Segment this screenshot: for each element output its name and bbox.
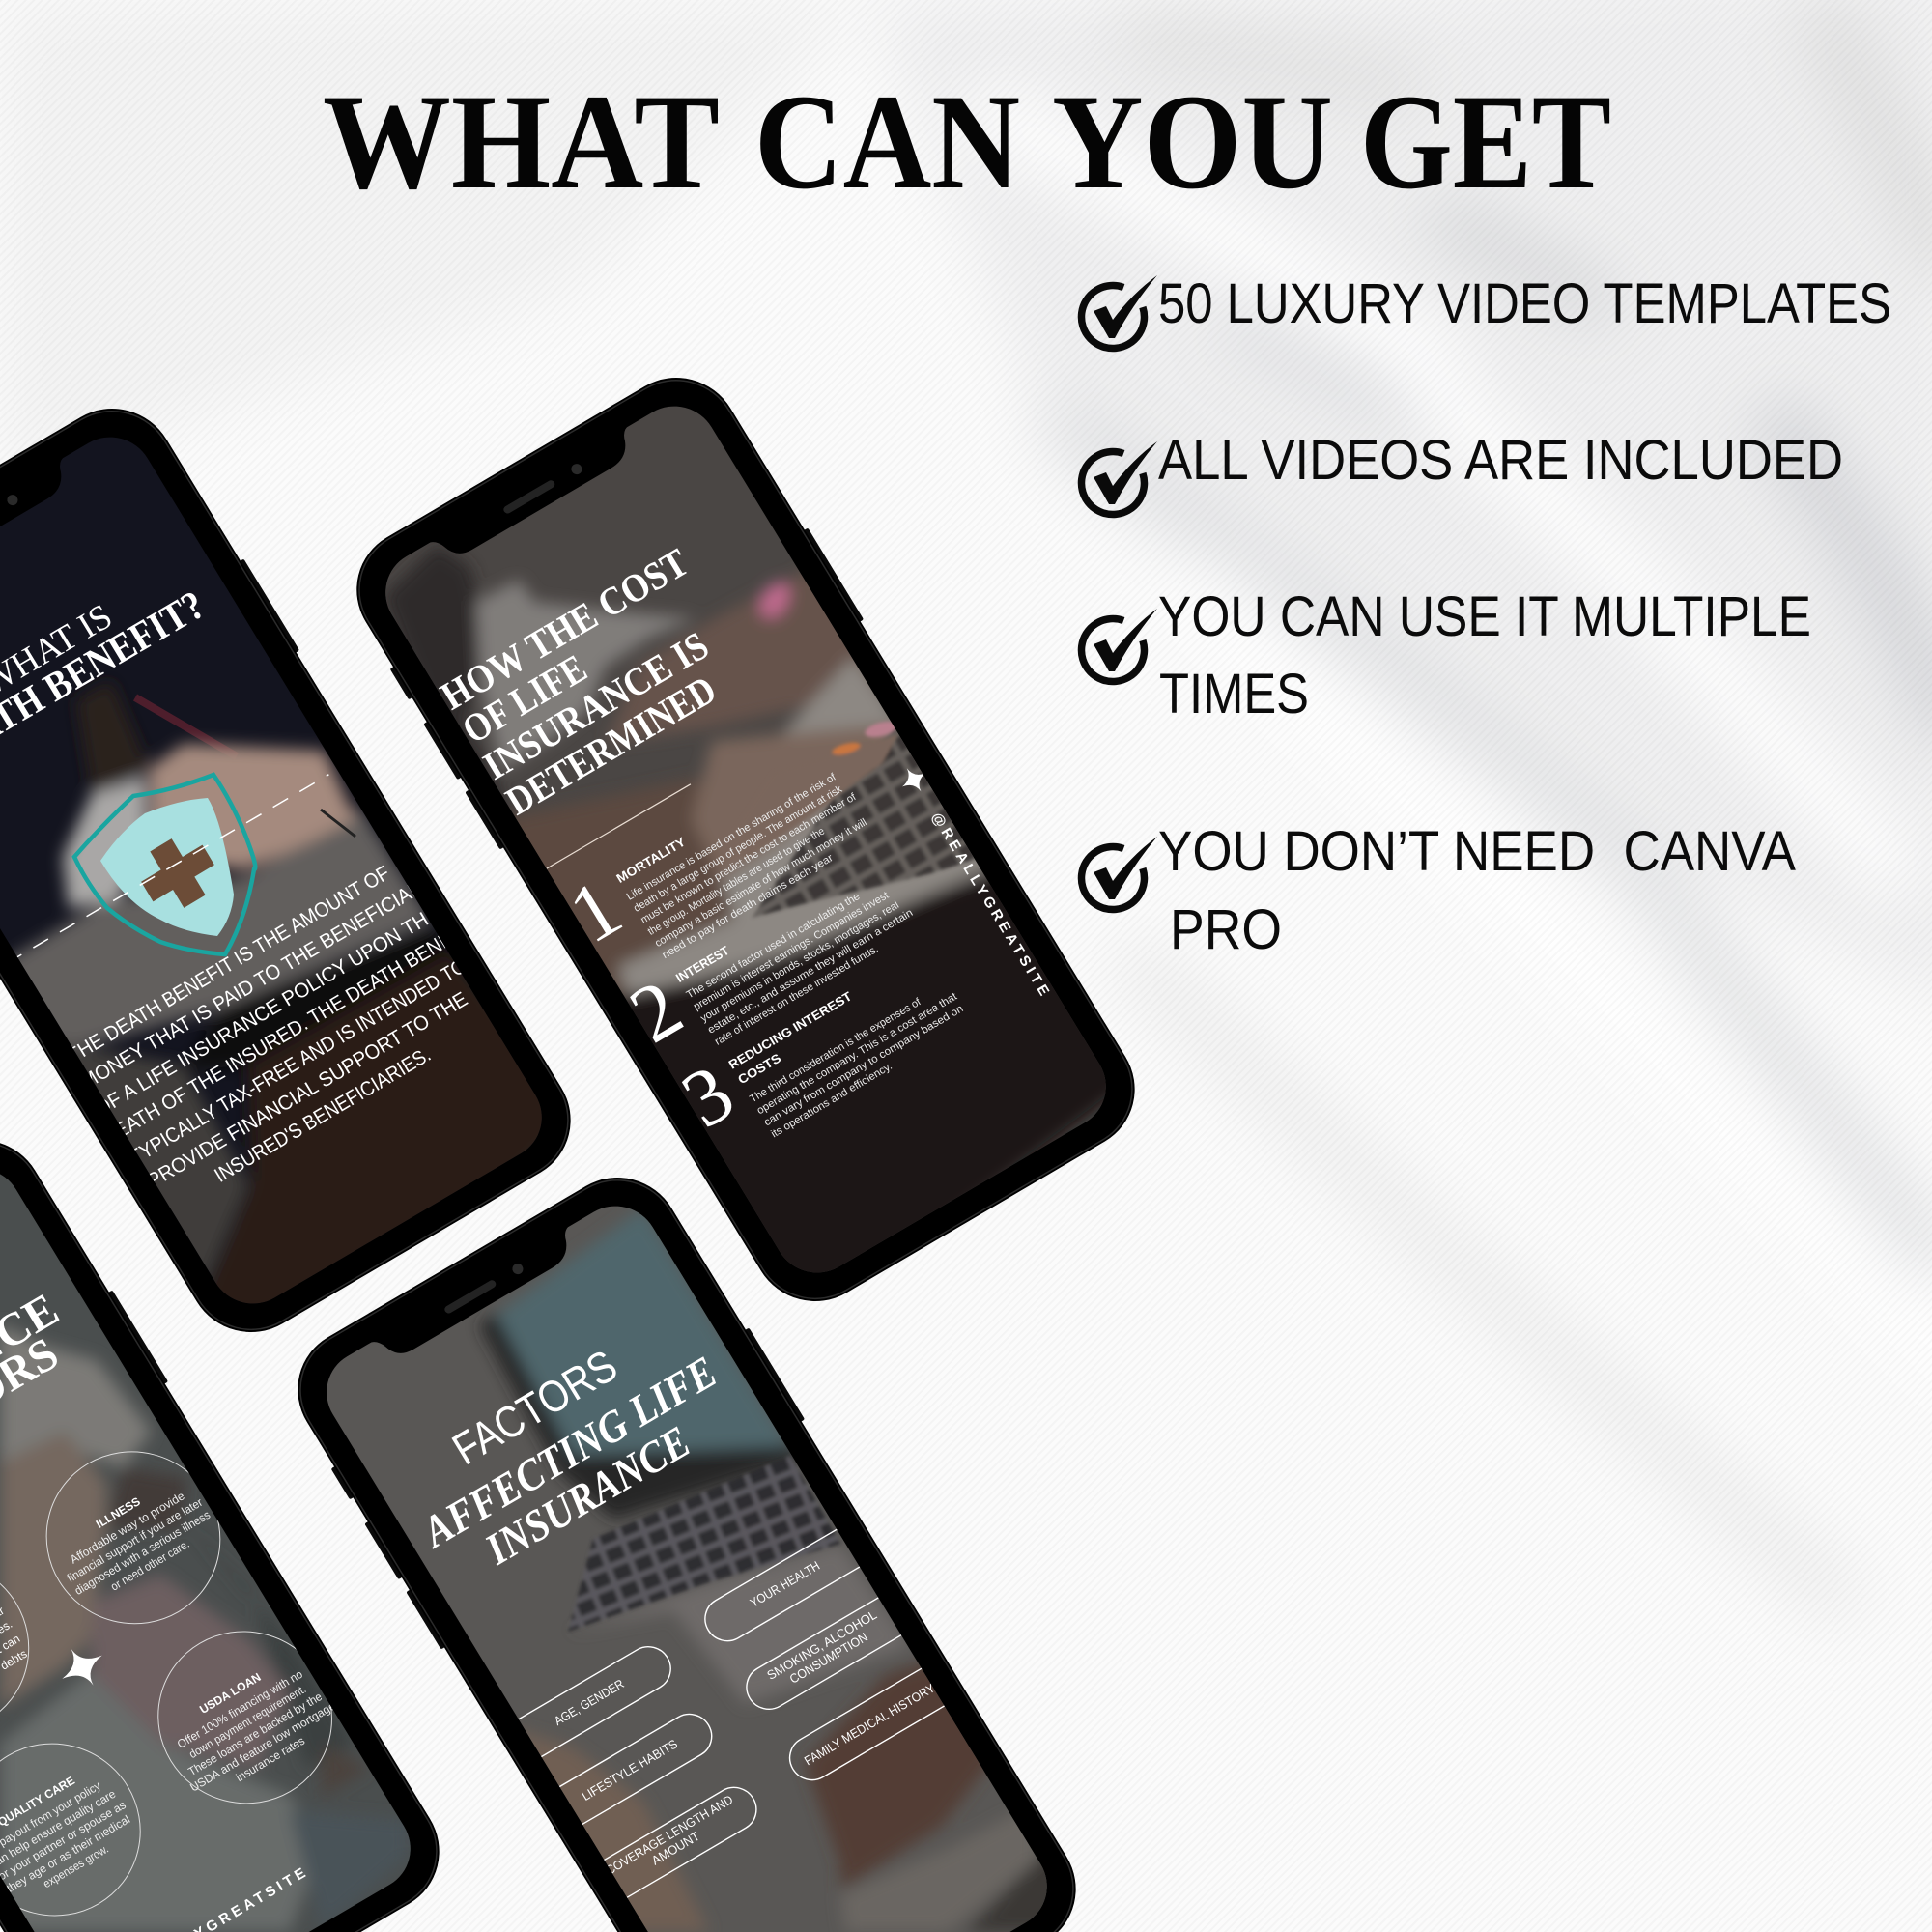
heading: [0, 593, 201, 734]
circle: usda loan: These loans are backed by the: [185, 1690, 325, 1778]
heading: [383, 1298, 750, 1598]
item: you don't need canva pro: [1081, 820, 1796, 961]
circle: usda loan: USDA and feature low mortgage: [187, 1698, 338, 1795]
phone: insurance factors: [0, 1115, 466, 1932]
item 2: interest: your premiums in bonds, stocks, mortgages, real: [698, 899, 901, 1025]
item 3: reducing interest costs: 3: [668, 1048, 749, 1146]
notch: [368, 1224, 585, 1368]
item 1: mortality: the group. Mortality tables are used to give the: [646, 826, 827, 938]
screen text: [339, 1262, 990, 1916]
heading: DETERMINED: [498, 667, 724, 823]
handle: @REALLYGREATSITE: [928, 810, 1052, 999]
title: CAN: [754, 67, 1020, 217]
notch: [0, 455, 80, 599]
item 3: reducing interest costs: The third consideration is the expenses of: [748, 996, 923, 1105]
pill: your health: YOUR HEALTH: [748, 1558, 822, 1610]
heading: [439, 548, 714, 815]
heading: FACTORS: [443, 1340, 626, 1474]
body text: THE DEATH BENEFIT IS THE AMOUNT OF: [64, 862, 394, 1067]
pill: family medical history: [781, 1643, 987, 1788]
body text: DEATH OF THE INSURED. THE DEATH BENEFIT IS: [99, 901, 501, 1151]
phone: what is death benefit: [0, 409, 571, 1332]
item 1: mortality: 1: [554, 863, 637, 960]
screen photo: laptop on desk: [479, 1208, 1111, 1932]
pill: smoking, alcohol consumption: [738, 1573, 945, 1718]
body text: MONEY THAT IS PAID TO THE BENEFICIARIES: [76, 860, 455, 1094]
circle: illness: ILLNESS: [94, 1494, 143, 1531]
circle: illness: Affordable way to provide: [68, 1489, 187, 1567]
item 3: reducing interest costs: its operations and efficiency.: [769, 1061, 895, 1140]
item 1: mortality: death by a large group of people. The amount at risk: [632, 783, 844, 915]
item 1: mortality: Life insurance is based on the sharing of the risk of: [625, 771, 838, 903]
item 2: interest: 2: [615, 963, 697, 1061]
pill: coverage length and amount: AMOUNT: [649, 1829, 702, 1868]
item 3: reducing interest costs: [682, 991, 964, 1138]
phone body: [330, 353, 1161, 1326]
body text: TYPICALLY TAX-FREE AND IS INTENDED TO: [126, 954, 470, 1169]
circle: quality care: they age or as their medical: [4, 1812, 132, 1895]
item: you can use it multiple times: [1081, 585, 1811, 725]
circle: illness: diagnosed with a serious illness: [72, 1508, 213, 1598]
pill: coverage length and amount: [574, 1779, 764, 1916]
item 3: reducing interest costs: operating the company. This is a cost area that: [755, 991, 959, 1117]
screen text and shield: [0, 593, 469, 1182]
item 2: interest: estate, etc., and assume they will earn a certain: [706, 907, 915, 1037]
phone body: [271, 1152, 1102, 1932]
item 1: mortality: company a basic estimate of how much money it will: [653, 816, 869, 950]
circle: usda loan: USDA LOAN: [197, 1670, 264, 1717]
body text: OF A LIFE INSURANCE POLICY UPON THE: [91, 901, 443, 1121]
heading: AFFECTING LIFE: [412, 1347, 725, 1558]
screen photo: hands on laptop: [386, 543, 1105, 1273]
screen photo: elderly couple: [0, 1324, 409, 1932]
phone: factors affecting life insurance: [298, 1178, 1076, 1932]
circle: usda loan: Offer 100% financing with no: [175, 1667, 305, 1751]
item: you don't need canva pro: YOU DON’T NEED CANVA: [1158, 820, 1796, 883]
heading: INSURANCE: [476, 1416, 698, 1575]
item 1: mortality: need to pay for death claims each year: [660, 852, 836, 961]
item: all videos are included: ALL VIDEOS ARE INCLUDED: [1158, 429, 1843, 492]
item 2: interest: premium is interest earnings. Companies invest: [692, 890, 891, 1012]
heading: HOW THE COST: [433, 540, 696, 718]
item: you can use it multiple times: TIMES: [1159, 663, 1309, 725]
item 1: mortality: MORTALITY: [613, 834, 688, 886]
item 2: interest: rate of interest on these invested funds.: [713, 943, 880, 1048]
pill: smoking, alcohol consumption: SMOKING, ALCOHOL: [764, 1607, 879, 1683]
pill: coverage length and amount: COVERAGE LENGTH AND: [603, 1792, 735, 1878]
title: WHAT: [323, 67, 720, 217]
heading: OF LIFE: [454, 645, 594, 752]
body text: INSURED'S BENEFICIARIES.: [211, 1043, 435, 1187]
factor pills: [486, 1504, 990, 1916]
screen text: [0, 1266, 409, 1932]
screen photo: hand signing document: [12, 684, 542, 1304]
pill: age, gender: AGE, GENDER: [552, 1676, 627, 1728]
dashed divider: [7, 775, 328, 963]
screen text: [439, 548, 1049, 1138]
item 1: mortality: must be known to predict the cost to each member of: [639, 791, 859, 926]
item: you can use it multiple times: YOU CAN USE IT MULTIPLE: [1158, 585, 1811, 648]
phone body: [0, 384, 597, 1357]
pill: smoking, alcohol consumption: CONSUMPTION: [787, 1630, 870, 1687]
item 2: interest: The second factor used in calculating the: [685, 891, 862, 1001]
circle: illness: or need other care.: [108, 1537, 192, 1594]
circle: illness: financial support if you are later: [65, 1495, 205, 1585]
pill: age, gender: [488, 1638, 679, 1775]
phone: how the cost of life insurance is determined: [356, 378, 1135, 1301]
heading: INSURANCE IS: [475, 623, 716, 788]
item 3: reducing interest costs: REDUCING INTEREST: [726, 989, 854, 1072]
circle: usda loan: insurance rates: [234, 1734, 307, 1784]
pill: lifestyle habits: [528, 1706, 720, 1842]
item 3: reducing interest costs: can vary from company to company based on: [762, 1003, 965, 1128]
item: all videos are included: [1081, 429, 1843, 515]
circle: partly cropped left: [0, 1529, 61, 1768]
notch: [427, 424, 644, 568]
title: YOU: [1052, 67, 1333, 217]
checklist: [1081, 272, 1891, 961]
body text: [72, 866, 469, 1182]
title: GET: [1360, 67, 1611, 217]
circle: quality care: [0, 1712, 173, 1932]
circle: illness: [14, 1420, 252, 1656]
heading: [0, 1284, 87, 1499]
item 1: mortality: [574, 773, 867, 958]
star icon: [902, 768, 923, 792]
circle: usda loan: [126, 1600, 364, 1835]
star icon: [51, 1637, 113, 1697]
pill: family medical history: FAMILY MEDICAL HISTORY: [802, 1681, 938, 1768]
item 3: reducing interest costs: COSTS: [735, 1050, 783, 1087]
circle: usda loan: down payment requirement.: [186, 1682, 308, 1761]
pill: lifestyle habits: LIFESTYLE HABITS: [580, 1736, 680, 1804]
pill: your health: [696, 1504, 903, 1649]
body text: PROVIDE FINANCIAL SUPPORT TO THE: [144, 988, 471, 1193]
phone body: [0, 1115, 466, 1932]
circle: quality care: expenses grow.: [41, 1842, 111, 1890]
shield icon: [74, 775, 255, 954]
title: [323, 67, 1611, 217]
item: you don't need canva pro: PRO: [1170, 898, 1282, 961]
item 2: interest: INTEREST: [673, 943, 731, 985]
item 2: interest: [630, 892, 913, 1045]
